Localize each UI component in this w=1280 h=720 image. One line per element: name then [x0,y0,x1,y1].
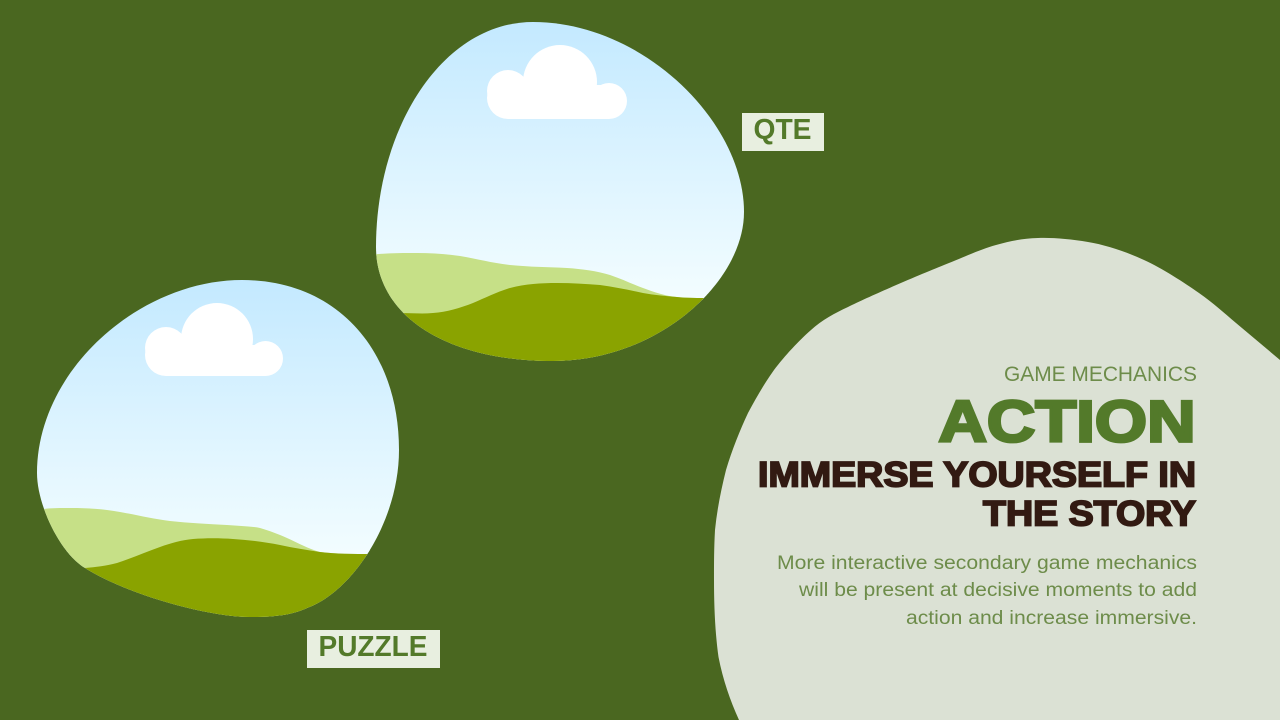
label: PUZZLE: PUZZLE [318,631,428,663]
body text [777,553,1197,629]
panel: text blob [714,238,1280,720]
heading: action: ACTION [938,390,1196,454]
body text: action and increase immersive. [906,608,1197,629]
eyebrow: game mechanics: GAME MECHANICS [1004,363,1197,386]
cloud [487,45,627,119]
body text: will be present at decisive moments to add [798,580,1197,601]
illustration: QTE landscape blob [370,20,750,370]
label: QTE [742,113,824,151]
hill: dark [404,283,704,361]
subheading [758,456,1196,534]
body text: More interactive secondary game mechanics [777,553,1197,574]
hill: dark [85,538,368,617]
hill: light [376,253,704,361]
subheading: THE STORY [983,494,1196,534]
cloud [145,303,283,376]
subheading: IMMERSE YOURSELF IN [758,456,1196,494]
label: QTE: QTE [754,114,812,146]
illustration: PUZZLE landscape blob [30,278,405,630]
hill: light [36,508,372,620]
